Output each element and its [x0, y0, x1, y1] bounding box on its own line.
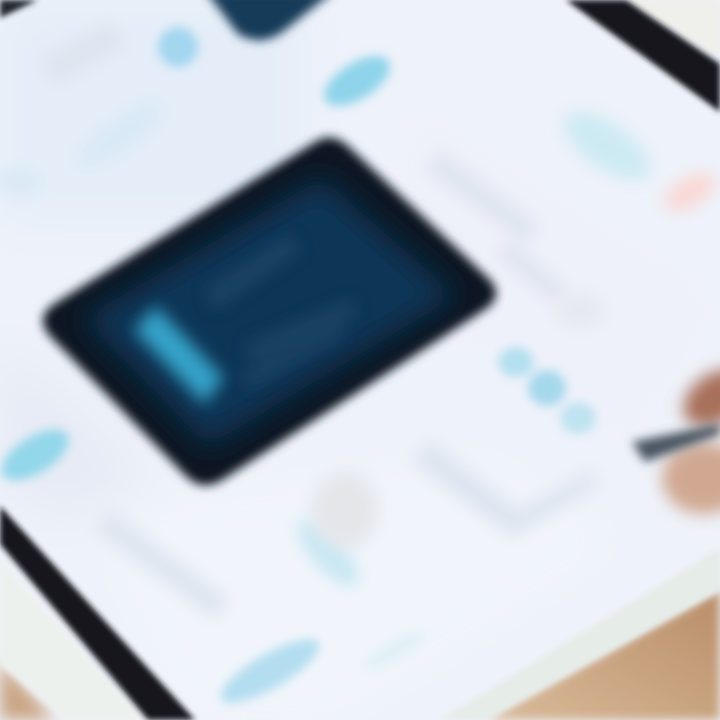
pill: faint bottom right [360, 624, 430, 676]
pen tip [632, 424, 720, 462]
tablet: dark rounded screen [43, 137, 496, 485]
off-white margin: top right [622, 0, 720, 58]
pill: salmon tag [659, 166, 720, 218]
pill: faint left [0, 168, 40, 196]
blob two [528, 370, 566, 406]
dark blob: top centre [205, 0, 335, 40]
screen faint text lines [205, 235, 358, 388]
black binding: bottom left [0, 506, 195, 720]
pill: left [0, 420, 77, 490]
hand holding pen [632, 358, 720, 514]
black binding: top right [566, 0, 720, 112]
screen teal highlight [134, 306, 224, 404]
blob three [560, 402, 596, 434]
pill: lower centre [288, 511, 368, 595]
pill: upper middle [316, 46, 398, 116]
dark blob: top left corner [0, 0, 38, 18]
paper edge: bottom right [440, 548, 720, 720]
pill: upper right [553, 99, 661, 193]
upper finger [673, 358, 720, 438]
tablet body [43, 137, 496, 485]
tablet screen [84, 178, 456, 446]
blob one [498, 347, 534, 377]
pill: top centre [158, 27, 198, 67]
pill: bottom [213, 628, 327, 714]
faint page text rows [40, 20, 600, 620]
grey block: right [555, 292, 605, 328]
wooden table: bottom left [0, 660, 55, 720]
grey image placeholder [311, 472, 379, 548]
pill: faint top left [71, 95, 169, 175]
wooden table: bottom right [486, 590, 720, 720]
lower finger [662, 442, 720, 514]
pill group: right middle [498, 347, 596, 434]
off-white margin: bottom left [0, 560, 145, 720]
